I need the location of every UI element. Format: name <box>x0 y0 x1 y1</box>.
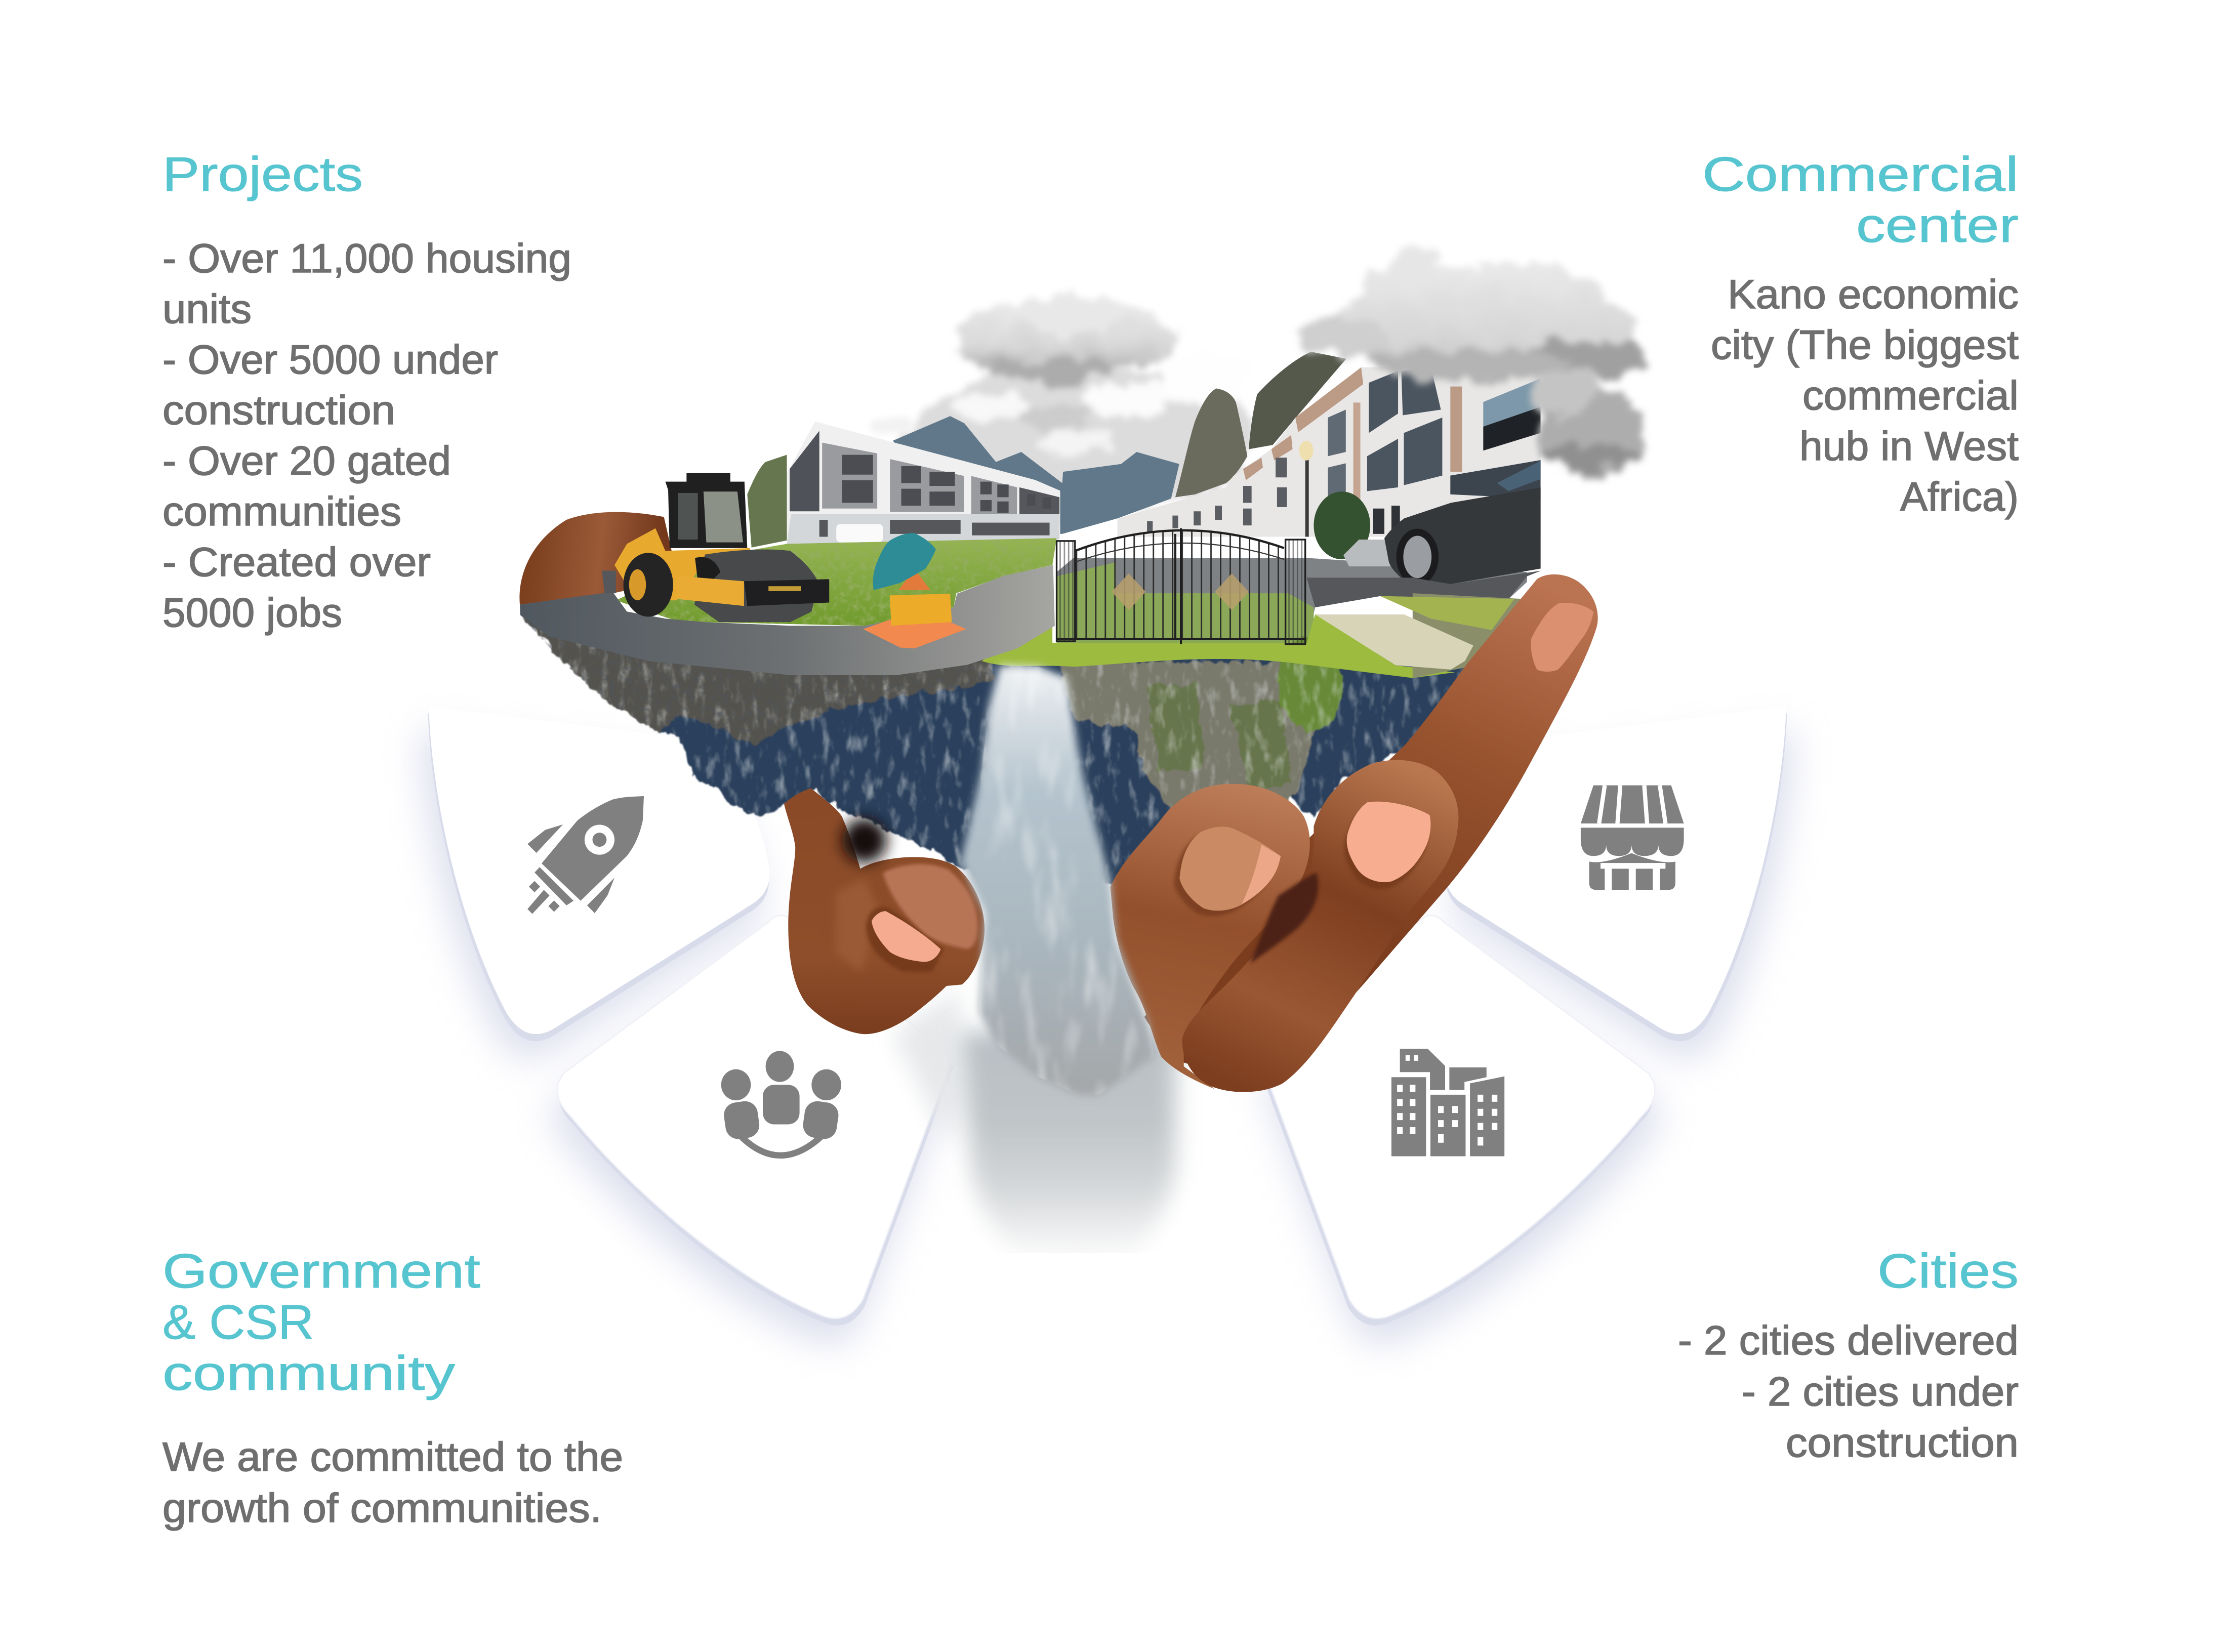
panel: rocket card <box>421 706 769 1058</box>
heading: Projects: Projects <box>162 147 363 201</box>
body: Projects list: communities <box>162 489 401 534</box>
scene: lawn behind road <box>618 538 1057 626</box>
top fingernail <box>1531 603 1593 672</box>
heading: Commercial center: center <box>1856 198 2019 253</box>
car: silver <box>1343 540 1391 566</box>
illustration: cards, scene and hand <box>421 250 1794 1344</box>
body: Projects list <box>162 236 571 636</box>
body: Commercial center description: commercial <box>1802 373 2019 419</box>
icon: shop <box>1581 786 1684 890</box>
body: Projects list: - Over 20 gated <box>162 438 451 484</box>
body: Projects list: construction <box>162 388 395 433</box>
panel: people card <box>553 916 954 1344</box>
heading: Government & CSR community: Government <box>162 1244 480 1298</box>
cloud: right <box>1297 250 1647 476</box>
ground behind gate <box>1057 558 1527 643</box>
scene: road <box>520 565 1055 675</box>
body: Projects list: units <box>162 286 252 332</box>
safety cone and helmet <box>863 533 966 648</box>
panel: city card <box>1259 916 1659 1344</box>
cab <box>665 473 747 548</box>
scene: front lawn and stream <box>982 593 1523 678</box>
hand: index finger <box>1182 760 1458 1092</box>
body: Commercial center description <box>1711 272 2019 520</box>
building: left housing block <box>787 422 1060 544</box>
mountains: blue range <box>893 416 1179 534</box>
hill behind roller <box>747 455 787 548</box>
waterfall mist <box>893 989 1175 1271</box>
body: community statement <box>162 1434 623 1531</box>
body: Commercial center description: city (The biggest <box>1711 322 2019 368</box>
body: Cities list <box>1678 1318 2019 1466</box>
body: community statement: We are committed to the <box>162 1434 623 1480</box>
helmet <box>873 533 936 590</box>
icon: city buildings <box>1391 1049 1504 1157</box>
text block: Government and CSR <box>162 1244 623 1531</box>
mountain: rock spire <box>1175 388 1247 497</box>
hand: left finger <box>784 788 985 1034</box>
scene: sky backdrop <box>870 350 1257 525</box>
heading: Cities: Cities <box>1877 1244 2019 1298</box>
rock island <box>509 614 1497 890</box>
road in front of car <box>1306 570 1541 607</box>
body: Projects list: - Over 5000 under <box>162 337 498 383</box>
body: Projects list: 5000 jobs <box>162 590 342 636</box>
heading: Government & CSR community: community <box>162 1346 455 1400</box>
body: Projects list: - Over 11,000 housing <box>162 236 571 281</box>
waterfall <box>961 664 1154 1095</box>
icon: rocket <box>527 796 644 914</box>
heading: Government & CSR community: & CSR <box>162 1295 314 1349</box>
gate <box>1057 528 1305 644</box>
hand: long back finger <box>1144 574 1598 1088</box>
text block: Projects <box>162 147 571 636</box>
body: Cities list: construction <box>1786 1420 2019 1466</box>
hand: left thumb behind the road <box>519 512 678 604</box>
building: right terrace <box>1118 367 1541 537</box>
panel: shop card <box>1446 706 1794 1058</box>
tree <box>1314 491 1370 559</box>
cloud: left <box>956 294 1177 382</box>
heading: Commercial center <box>1702 147 2019 253</box>
heading: Government & CSR community <box>162 1244 480 1400</box>
body: community statement: growth of communities. <box>162 1485 602 1531</box>
body: Commercial center description: Kano economic <box>1728 272 2019 317</box>
body: Commercial center description: Africa) <box>1900 474 2019 520</box>
heading: Commercial center: Commercial <box>1702 147 2019 201</box>
body: Cities list: - 2 cities under <box>1742 1369 2019 1415</box>
body: Cities list: - 2 cities delivered <box>1678 1318 2019 1364</box>
body: Commercial center description: hub in West <box>1799 424 2019 469</box>
car: black <box>1384 461 1541 586</box>
mountain: tall peak <box>1249 352 1346 449</box>
body: Projects list: - Created over <box>162 540 431 585</box>
road roller <box>602 473 829 622</box>
lawn inside gate <box>1057 562 1314 644</box>
text block: Commercial center <box>1702 147 2019 520</box>
text block: Cities <box>1678 1244 2019 1466</box>
hand: middle finger <box>1111 784 1310 1089</box>
cloud: small <box>1198 338 1263 363</box>
icon: people <box>721 1051 841 1155</box>
